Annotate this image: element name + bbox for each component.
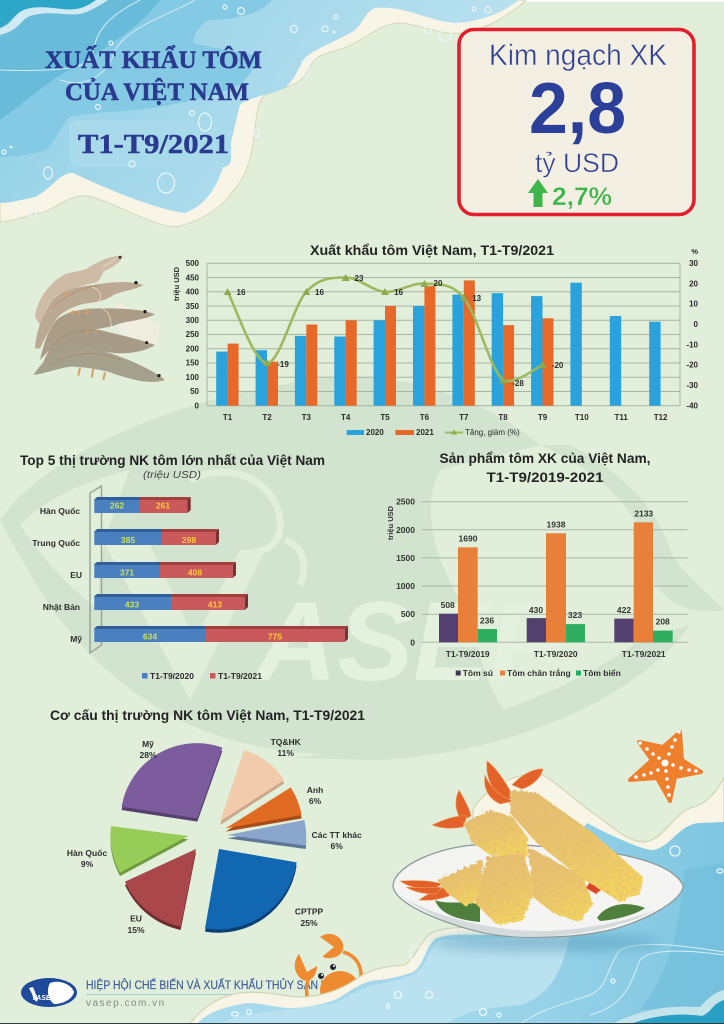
- pie slices: [110, 743, 306, 933]
- market labels: Nhật Bản: [43, 602, 80, 612]
- legend: Tôm chân trắng: [507, 667, 571, 678]
- pie labels: Các TT khác: [312, 830, 362, 840]
- pie labels: 6%: [331, 841, 343, 851]
- icon: up arrow: [528, 179, 548, 207]
- month labels: T1: [223, 413, 233, 422]
- chart title: Xuất khẩu tôm Việt Nam, T1-T9/2021: [310, 242, 554, 258]
- pie labels: Mỹ: [142, 739, 154, 749]
- left axis: 200: [186, 344, 200, 354]
- bar: EU: 371: [120, 568, 134, 578]
- month labels: T10: [575, 413, 589, 422]
- right axis: -10: [686, 340, 699, 349]
- value labels: 236: [480, 616, 494, 626]
- icon: VASEP logo: [21, 978, 77, 1007]
- title: CỦA VIỆT NAM: [65, 78, 249, 106]
- pie labels: [67, 737, 362, 935]
- legend: T1-T9/2021: [218, 671, 262, 681]
- value labels: 430: [529, 605, 543, 615]
- left axis: [172, 259, 200, 410]
- line: growth rate: -20: [552, 361, 564, 370]
- bar: Nhật Bản: 413: [208, 600, 222, 610]
- pie labels: 9%: [81, 859, 94, 869]
- left axis: 300: [186, 316, 200, 325]
- line: growth rate: 16: [315, 288, 324, 297]
- y axis: 2000: [396, 525, 415, 535]
- month labels: T7: [459, 413, 469, 422]
- month labels: T4: [341, 413, 351, 422]
- market labels: Trung Quốc: [32, 538, 80, 548]
- right axis: 30: [689, 259, 699, 268]
- website: vasep.com.vn: [86, 998, 166, 1009]
- legend: T1-T9/2020: [150, 671, 194, 681]
- chart title: Cơ cấu thị trường NK tôm Việt Nam, T1-T9/2021: [50, 707, 365, 723]
- left axis: 250: [186, 330, 200, 339]
- bottom shore and water: [190, 774, 724, 1024]
- image: shrimp tempura plate: [393, 761, 683, 951]
- bar: Mỹ: 775: [268, 632, 282, 642]
- pie labels: EU: [130, 914, 142, 924]
- pie labels: Hàn Quốc: [67, 848, 107, 858]
- callout: export value: Kim ngạch XK: [489, 39, 667, 72]
- line: growth rate: 13: [472, 294, 482, 303]
- chart: top 5 markets: [20, 452, 348, 681]
- pie labels: CPTPP: [295, 906, 323, 916]
- period labels: T1-T9/2019: [446, 649, 490, 659]
- y axis: triệu USD: [386, 505, 395, 540]
- bar: Trung Quốc: 385: [121, 535, 135, 545]
- value labels: 422: [617, 605, 631, 615]
- unit note: (triệu USD): [143, 469, 201, 481]
- icon: crab: [295, 934, 361, 1009]
- leaves: [435, 900, 645, 922]
- line: growth rate: -19: [277, 360, 289, 369]
- tails: [400, 761, 603, 900]
- bars: 2019: [439, 547, 497, 642]
- market labels: Hàn Quốc: [40, 506, 80, 516]
- bars: 2020: [527, 533, 585, 642]
- y axis: 1000: [396, 581, 415, 591]
- bars: 2021: [614, 522, 673, 642]
- pie labels: 15%: [127, 925, 145, 935]
- bars 2020: [216, 283, 661, 406]
- legend: [142, 671, 262, 681]
- right axis: 10: [689, 300, 699, 309]
- pie labels: 6%: [309, 796, 322, 806]
- title: T1-T9/2021: [78, 129, 229, 159]
- icon: VASEP logo: VASEP: [32, 995, 56, 1002]
- chart title: Sản phẩm tôm XK của Việt Nam,: [440, 450, 650, 466]
- left axis: 500: [186, 259, 200, 268]
- y axis: 0: [410, 637, 415, 647]
- pie labels: 28%: [139, 750, 157, 760]
- callout: export value: 2,7%: [552, 183, 612, 211]
- legend: Tôm sú: [463, 668, 493, 678]
- left axis: 50: [190, 387, 200, 396]
- month labels: T3: [302, 413, 312, 422]
- left axis: 450: [186, 273, 200, 282]
- legend: [347, 428, 520, 437]
- bar: Mỹ: 634: [143, 632, 157, 642]
- title: XUẤT KHẨU TÔM: [45, 45, 262, 74]
- bar: Nhật Bản: [94, 594, 248, 610]
- month labels: T11: [615, 413, 628, 422]
- callout: export value: 2,8: [529, 69, 626, 149]
- value labels: 508: [441, 600, 455, 610]
- callout: export value: [459, 30, 694, 214]
- y axis: [386, 497, 415, 647]
- line: growth rate: 23: [355, 274, 364, 283]
- y axis: 500: [401, 609, 415, 619]
- bar: EU: [94, 562, 236, 578]
- chart title: T1-T9/2019-2021: [486, 469, 604, 485]
- pie labels: Anh: [307, 785, 323, 795]
- y axis: 2500: [396, 497, 415, 507]
- value labels: [441, 508, 670, 627]
- bar: Nhật Bản: 433: [125, 600, 139, 610]
- top-left water and shore: [0, 0, 724, 227]
- legend: [456, 667, 621, 678]
- bar: Trung Quốc: 298: [182, 535, 196, 545]
- y axis: 1500: [396, 553, 415, 563]
- chart: monthly shrimp exports: [172, 242, 699, 437]
- image: shrimp: [33, 256, 165, 382]
- market labels: Mỹ: [70, 634, 82, 644]
- watermark: VASEP logo: ASEP: [252, 579, 565, 704]
- right axis: 20: [689, 279, 699, 288]
- line: growth rate: 20: [434, 279, 443, 288]
- right axis: -40: [686, 402, 699, 410]
- tempura pieces: [437, 790, 643, 925]
- left axis: 0: [195, 402, 200, 410]
- market labels: [32, 506, 82, 644]
- value labels: 2133: [634, 508, 653, 518]
- bar: Hàn Quốc: 262: [110, 500, 124, 510]
- value labels: 323: [568, 610, 582, 620]
- bar: Trung Quốc: [94, 529, 219, 545]
- association name: HIỆP HỘI CHẾ BIẾN VÀ XUẤT KHẨU THỦY SẢN VIỆT NAM: [86, 979, 370, 992]
- legend: 2021: [416, 428, 434, 437]
- chart title: Top 5 thị trường NK tôm lớn nhất của Việt Nam: [20, 452, 325, 468]
- bar: Mỹ: [94, 626, 348, 642]
- month labels: T2: [262, 413, 272, 422]
- pie labels: 11%: [277, 748, 294, 758]
- month labels: T6: [420, 413, 430, 422]
- plate: [393, 844, 683, 937]
- pie labels: TQ&HK: [271, 737, 302, 747]
- legend: 2020: [366, 428, 384, 437]
- left axis: 400: [186, 288, 200, 296]
- title: [45, 45, 262, 159]
- watermark: VASEP logo: [0, 377, 724, 760]
- month labels: T12: [654, 413, 668, 422]
- month labels: T9: [538, 413, 548, 422]
- callout: export value: tỷ USD: [535, 148, 619, 178]
- line: growth rate: 16: [237, 288, 246, 297]
- line: growth rate: 16: [394, 288, 404, 297]
- bar: Hàn Quốc: 261: [156, 500, 170, 510]
- period labels: [446, 649, 666, 659]
- legend: Tôm biển: [583, 668, 621, 678]
- legend: Tăng, giảm (%): [465, 428, 520, 437]
- chart title: [440, 450, 650, 485]
- value labels: 1690: [459, 533, 478, 543]
- left axis: 100: [186, 373, 200, 382]
- right axis: -20: [686, 361, 699, 370]
- chart: shrimp products: [386, 450, 688, 678]
- month labels: [223, 413, 668, 422]
- period labels: T1-T9/2021: [622, 649, 666, 659]
- line: growth rate: [224, 274, 564, 388]
- right axis: -30: [686, 381, 699, 390]
- bars 2021: [228, 280, 554, 406]
- left axis: 350: [186, 302, 200, 311]
- period labels: T1-T9/2020: [534, 649, 578, 659]
- chart: market share pie: [50, 707, 365, 935]
- bar: Hàn Quốc: [94, 497, 191, 513]
- left axis: triệu USD: [172, 266, 181, 301]
- bar: EU: 408: [188, 568, 202, 578]
- month labels: T5: [380, 413, 390, 422]
- right axis: 0: [694, 320, 699, 329]
- right axis: [686, 247, 699, 410]
- right axis: %: [691, 247, 698, 256]
- value labels: 208: [656, 617, 670, 627]
- left axis: 150: [186, 359, 200, 368]
- month labels: T8: [498, 413, 508, 422]
- icon: starfish: [630, 730, 701, 801]
- footer: association name: [21, 978, 370, 1009]
- pie labels: 25%: [300, 918, 318, 928]
- line: growth rate: -28: [512, 379, 524, 388]
- market labels: EU: [70, 570, 82, 580]
- value labels: 1938: [547, 519, 566, 529]
